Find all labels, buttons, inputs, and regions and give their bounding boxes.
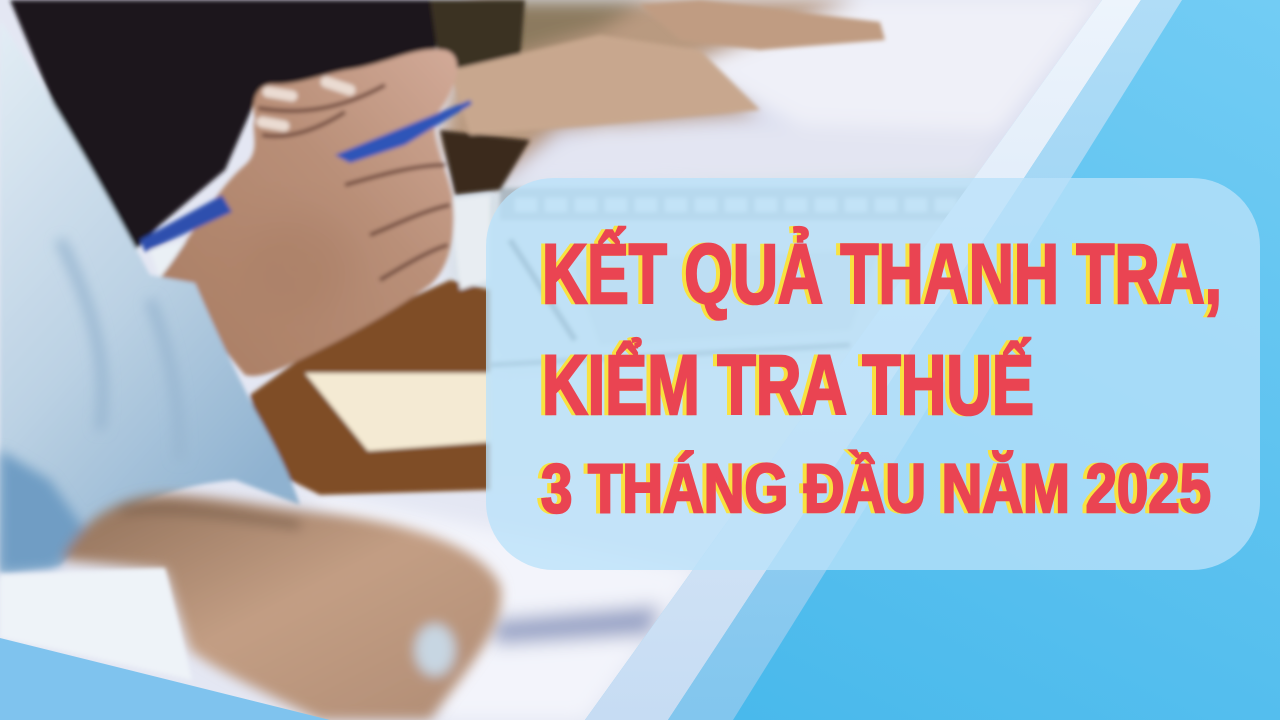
dark suit xyxy=(10,0,440,250)
bottom hand xyxy=(62,494,501,720)
title text xyxy=(541,227,1222,527)
title text: KIỂM TRA THUẾ xyxy=(542,338,1034,432)
finger lines xyxy=(258,85,450,280)
white bottom cuff xyxy=(0,568,192,680)
diagonal band: light blue xyxy=(668,0,1182,720)
notepad xyxy=(305,373,490,451)
diagonal band: white xyxy=(585,0,1141,720)
bottom-left blue corner xyxy=(0,638,330,720)
shirt sleeve xyxy=(0,20,300,572)
translucent title panel xyxy=(486,178,1260,570)
cuff xyxy=(146,240,187,276)
hand shading xyxy=(245,215,355,315)
wooden table xyxy=(250,280,490,495)
hand top xyxy=(160,49,457,376)
keyboard rows xyxy=(490,188,970,365)
pen xyxy=(335,100,472,163)
white shirt cuff by hand xyxy=(450,195,490,290)
